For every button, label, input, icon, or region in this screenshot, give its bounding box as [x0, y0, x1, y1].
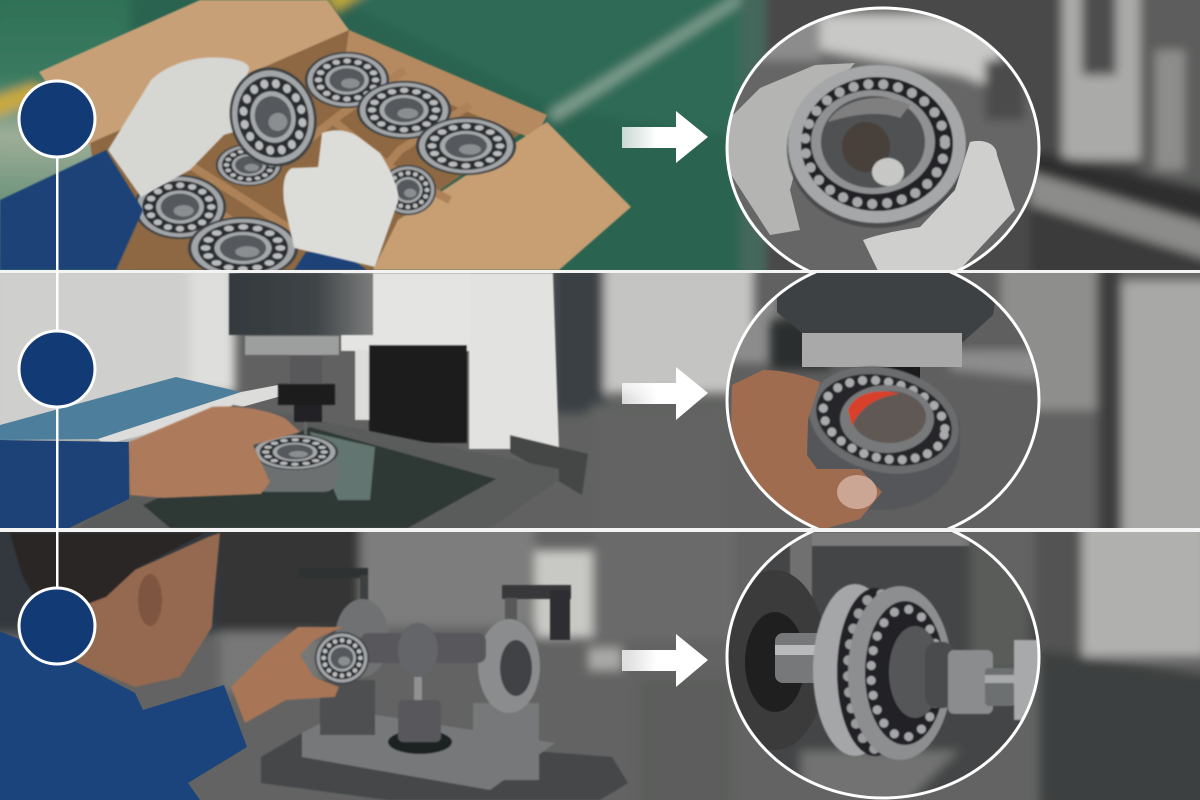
- panel: step 3 shaft test: [0, 522, 1200, 800]
- big bearing on shaft: [813, 584, 952, 760]
- arrow 3: [622, 634, 708, 687]
- green floor: [0, 0, 770, 280]
- white dividers between panels: [0, 270, 1200, 532]
- zoomed glove left: [728, 63, 855, 235]
- zoomed bearing: [787, 65, 967, 228]
- zoomed hand: [730, 370, 882, 530]
- blurred background right: [768, 0, 1200, 280]
- arrow 2: [622, 367, 708, 420]
- panel: step 1 unpacking: [0, 0, 1200, 280]
- table and glass: [142, 404, 560, 528]
- callout circle 3: [723, 516, 1044, 800]
- timeline connector: [56, 119, 58, 626]
- step marker 2: [19, 331, 95, 407]
- cardboard box: [39, 0, 631, 270]
- hand: [129, 407, 300, 498]
- left plate: [728, 570, 821, 750]
- shaft end: [925, 640, 1044, 720]
- worker body: [0, 632, 247, 800]
- sample bearing: [252, 434, 338, 492]
- callout circle 1: [726, 6, 1040, 270]
- sleeve: [0, 440, 129, 528]
- white machine column: [341, 273, 588, 495]
- test rig: [261, 568, 628, 800]
- blurred workshop background: [0, 522, 1200, 800]
- panel: step 2 machine contact: [0, 263, 1200, 543]
- zoomed glove right: [863, 141, 1015, 275]
- gloves and bearing in hand: [108, 57, 398, 267]
- bearings in box: [134, 52, 516, 279]
- shaft: [775, 633, 818, 683]
- step marker 3: [19, 588, 95, 664]
- callout circle 2: [727, 258, 1040, 542]
- arrow 1: [622, 111, 708, 163]
- worker sleeves: [0, 150, 367, 270]
- blurred wall and floor: [0, 263, 1200, 543]
- man's head: [10, 533, 220, 687]
- step marker 1: [19, 81, 95, 157]
- zoomed bearing with red glow: [808, 366, 959, 510]
- machine head and spindle: [229, 273, 373, 442]
- bearing and hand: [231, 627, 369, 723]
- teal bench: [0, 377, 241, 440]
- zoomed machine head: [777, 273, 1000, 342]
